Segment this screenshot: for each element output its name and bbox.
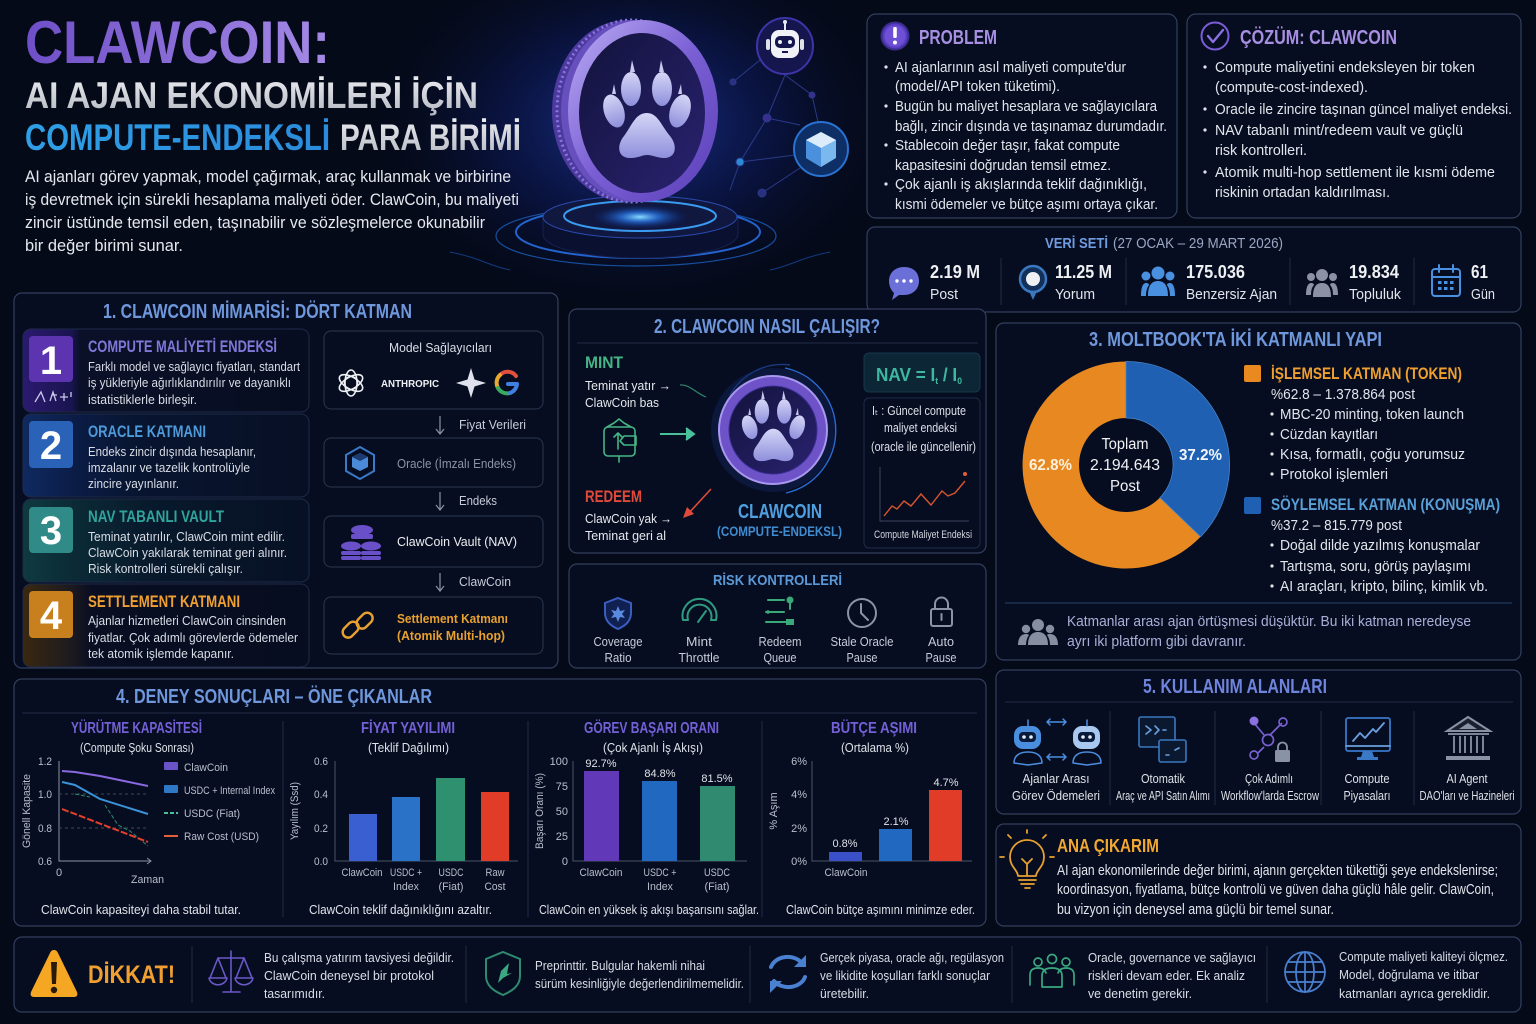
chart: execution capacity: 1.2 bbox=[38, 756, 52, 768]
chart: budget overrun: 2.1% bbox=[883, 816, 909, 828]
chart: task success rate: (Çok Ajanlı İş Akışı) bbox=[603, 741, 703, 755]
chart: task success rate: Başarı Oranı (%) bbox=[534, 773, 546, 849]
arrow: clawcoin: ClawCoin bbox=[459, 575, 511, 589]
legend bbox=[164, 762, 275, 843]
box: model providers: Model Sağlayıcıları bbox=[389, 340, 492, 355]
dataset heading: (27 OCAK – 29 MART 2026) bbox=[1113, 235, 1283, 252]
solution list: (compute-cost-indexed). bbox=[1215, 80, 1368, 96]
chart: execution capacity: 0.6 bbox=[38, 856, 52, 868]
chart: execution capacity: 0.8 bbox=[38, 823, 52, 835]
use case: compute markets bbox=[1344, 718, 1390, 803]
arrow: index bbox=[436, 492, 497, 510]
box: NAV formula: NAV = I bbox=[876, 365, 938, 385]
risk: redeem queue: Redeem bbox=[758, 635, 802, 649]
problem heading: PROBLEM bbox=[919, 27, 997, 49]
layer 4 card: 4 bbox=[40, 594, 63, 638]
disclaimer: ongoing risks: Oracle, governance ve sağlayıcı bbox=[1088, 951, 1256, 965]
stat: agents: 175.036 bbox=[1186, 262, 1245, 282]
disclaimer: preprint: Preprinttir. Bulgular hakemli nihai bbox=[535, 959, 705, 973]
arrow: index: Endeks bbox=[459, 494, 497, 508]
disclaimer: compute is not quality bbox=[1285, 950, 1508, 1001]
disclaimer: real-world conditions: ve likidite koşulları farklı sonuçlar bbox=[820, 969, 990, 983]
disclaimer: preprint bbox=[486, 952, 744, 995]
disclaimer: not investment advice: tasarımıdır. bbox=[264, 987, 325, 1001]
center coin: CLAWCOIN bbox=[738, 501, 822, 523]
solution list: Atomik multi-hop settlement ile kısmi ödeme bbox=[1215, 165, 1495, 181]
box: NAV formula: / I bbox=[938, 365, 957, 385]
risk: auto pause: Auto bbox=[928, 635, 954, 649]
disclaimer: not investment advice: Bu çalışma yatırım tavsiyesi değildir. bbox=[264, 951, 454, 965]
use case: agent payments: Ajanlar Arası bbox=[1022, 772, 1090, 786]
chart: task success rate: (Fiat) bbox=[704, 881, 730, 893]
box: NAV formula bbox=[864, 353, 980, 392]
layer 1 card: Farklı model ve sağlayıcı fiyatları, standart bbox=[88, 359, 300, 374]
layer 4 card: tek atomik işlemde kapanır. bbox=[88, 646, 234, 661]
center coin: (COMPUTE-ENDEKSL) bbox=[717, 523, 842, 539]
chart: task success rate: GÖREV BAŞARI ORANI bbox=[584, 718, 719, 737]
box: oracle: Oracle (İmzalı Endeks) bbox=[397, 456, 516, 471]
subtitle line 2a: COMPUTE-ENDEKSLİ bbox=[25, 117, 330, 158]
legend: transactional layer: MBC-20 minting, token launch bbox=[1280, 407, 1464, 423]
stat: posts: 2.19 M bbox=[930, 262, 980, 282]
icon: warning triangle bbox=[31, 950, 77, 997]
risk: coverage ratio: Ratio bbox=[604, 651, 632, 665]
paw emblem bbox=[599, 60, 695, 158]
icon: check bbox=[1202, 22, 1228, 50]
solution heading: ÇÖZÜM: CLAWCOIN bbox=[1240, 26, 1397, 49]
stat: comments: Yorum bbox=[1055, 287, 1095, 303]
layer 2 card: zincire yayınlanır. bbox=[88, 476, 179, 491]
box: index description and sparkline: Compute Maliyet Endeksi bbox=[874, 529, 972, 541]
box: index description and sparkline bbox=[864, 398, 980, 548]
panel: section 4 results bbox=[14, 679, 986, 926]
chart: budget overrun: 0% bbox=[791, 856, 807, 868]
stat: days: 61 bbox=[1471, 262, 1488, 282]
panel: key takeaway bbox=[996, 824, 1521, 926]
legend: transactional layer: İŞLEMSEL KATMAN (TOKEN) bbox=[1271, 364, 1462, 383]
layer 3 card: Risk kontrolleri sürekli çalışır. bbox=[88, 561, 243, 576]
overlap note bbox=[1067, 614, 1471, 650]
legend: transactional layer bbox=[1244, 364, 1465, 483]
risk: coverage ratio bbox=[594, 598, 643, 665]
use case: DAO treasuries bbox=[1420, 717, 1514, 803]
icon: exclamation bbox=[882, 22, 908, 50]
problem list: bağlı, zincir dışında ve taşınamaz durumdadır. bbox=[895, 119, 1167, 135]
coin bbox=[552, 20, 702, 202]
problem list: AI ajanlarının asıl maliyeti compute'dur bbox=[895, 60, 1126, 76]
solution list: risk kontrolleri. bbox=[1215, 143, 1307, 159]
legend: transactional layer: Protokol işlemleri bbox=[1280, 467, 1388, 483]
use case: automated purchasing bbox=[1116, 717, 1210, 803]
box: settlement: Settlement Katmanı bbox=[397, 611, 508, 626]
layer 3 card: NAV TABANLI VAULT bbox=[88, 507, 224, 526]
stat: comments bbox=[1020, 262, 1112, 303]
redeem block: Teminat geri al bbox=[585, 528, 666, 543]
overlap note: ayrı iki platform gibi davranır. bbox=[1067, 634, 1246, 650]
chart: price dispersion: 0.4 bbox=[314, 789, 328, 801]
chart: task success rate: 75 bbox=[556, 781, 568, 793]
chart: task success rate: 100 bbox=[550, 756, 568, 768]
subtitle line 1: AI AJAN EKONOMİLERİ İÇİN bbox=[25, 75, 478, 116]
use case: escrow: Workflow'larda Escrow bbox=[1221, 789, 1320, 803]
stat: posts bbox=[889, 262, 980, 303]
mint block: ClawCoin bas bbox=[585, 395, 659, 410]
icon: G logo bbox=[497, 372, 517, 393]
section 1 heading: 1. CLAWCOIN MİMARİSİ: DÖRT KATMAN bbox=[103, 300, 412, 323]
chart: price dispersion: ClawCoin teklif dağınıklığını azaltır. bbox=[309, 902, 492, 917]
disclaimer: real-world conditions bbox=[770, 951, 1004, 1001]
solution list: riskinin ortadan kaldırılması. bbox=[1215, 185, 1390, 201]
layer 2 card: 2 bbox=[40, 424, 62, 468]
chart: budget overrun: 4% bbox=[791, 789, 807, 801]
panel: risk controls bbox=[569, 564, 986, 668]
platform rings bbox=[450, 196, 830, 270]
risk: stale oracle pause bbox=[830, 599, 894, 665]
panel: section 5 use cases bbox=[996, 670, 1521, 814]
chart: task success rate: ClawCoin bbox=[580, 867, 622, 879]
legend: conversational layer bbox=[1244, 495, 1500, 595]
legend: conversational layer: Tartışma, soru, görüş paylaşımı bbox=[1280, 559, 1471, 575]
chart: execution capacity: 0 bbox=[56, 867, 62, 879]
mint block: MINT bbox=[585, 353, 624, 372]
box: settlement: (Atomik Multi-hop) bbox=[397, 628, 505, 643]
chart: price dispersion: Yayılım (Ssd) bbox=[289, 782, 301, 840]
risk: mint throttle: Mint bbox=[686, 635, 713, 649]
chart: budget overrun bbox=[768, 718, 975, 917]
chart: compute cost index bbox=[880, 467, 969, 521]
risk: redeem queue bbox=[758, 596, 802, 665]
intro paragraph: iş devretmek için sürekli hesaplama maliyeti öder. ClawCoin, bu maliyeti bbox=[25, 190, 519, 209]
chart: budget overrun: ClawCoin bütçe aşımını minimze eder. bbox=[786, 902, 975, 917]
box: model providers bbox=[324, 331, 543, 409]
layer 2 card bbox=[23, 414, 309, 497]
legend: conversational layer: AI araçları, kripto, bilinç, kimlik vb. bbox=[1280, 579, 1488, 595]
disclaimer: not investment advice bbox=[209, 951, 454, 1001]
box: index description and sparkline: (oracle ile güncellenir) bbox=[871, 440, 976, 454]
use case: escrow: Çok Adımlı bbox=[1245, 772, 1293, 786]
takeaway text: bu vizyon için deneysel ama güçlü bir temel sunar. bbox=[1057, 902, 1334, 918]
risk: coverage ratio: Coverage bbox=[594, 635, 643, 649]
layer 3 card: ClawCoin yakılarak teminat geri alınır. bbox=[88, 545, 287, 560]
risk: redeem queue: Queue bbox=[764, 651, 797, 665]
intro paragraph bbox=[25, 167, 519, 255]
title block bbox=[25, 9, 521, 158]
chart: budget overrun: (Ortalama %) bbox=[841, 741, 909, 755]
chart: task success rate bbox=[534, 718, 759, 917]
donut chart bbox=[1023, 362, 1230, 569]
panel: section 3 two-layer structure bbox=[996, 323, 1521, 660]
stat: communities: 19.834 bbox=[1349, 262, 1399, 282]
risk: auto pause: Pause bbox=[926, 651, 957, 665]
warning heading: DİKKAT! bbox=[88, 961, 175, 989]
disclaimer: compute is not quality: Compute maliyeti kaliteyi ölçmez. bbox=[1339, 950, 1508, 964]
chart: task success rate: 81.5% bbox=[701, 773, 733, 785]
takeaway text bbox=[1057, 863, 1498, 918]
chart: price dispersion: USDC + bbox=[390, 867, 422, 879]
icon: group bbox=[1018, 619, 1058, 645]
chart: execution capacity: Gönell Kapasite bbox=[21, 774, 33, 848]
chart: budget overrun: 6% bbox=[791, 756, 807, 768]
risk: mint throttle: Throttle bbox=[678, 651, 720, 665]
chart: execution capacity: (Compute Şoku Sonrası) bbox=[80, 741, 194, 755]
legend: conversational layer: Doğal dilde yazılmış konuşmalar bbox=[1280, 538, 1480, 554]
donut chart: Toplam bbox=[1102, 436, 1148, 453]
problem list: kapasitesini doğrudan temsil etmez. bbox=[895, 158, 1111, 174]
layer 4 card: SETTLEMENT KATMANI bbox=[88, 592, 240, 611]
section 3 heading: 3. MOLTBOOK'TA İKİ KATMANLI YAPI bbox=[1089, 328, 1382, 351]
chart: execution capacity: ClawCoin kapasiteyi daha stabil tutar. bbox=[41, 902, 241, 917]
chart: price dispersion: ClawCoin bbox=[342, 867, 382, 879]
layer 1 card: COMPUTE MALİYETİ ENDEKSİ bbox=[88, 337, 277, 356]
layer 4 card: fiyatlar. Çok adımlı görevlerde ödemeler bbox=[88, 630, 299, 645]
disclaimer: compute is not quality: katmanları ayrıca gereklidir. bbox=[1339, 987, 1490, 1001]
layer 2 card: ORACLE KATMANI bbox=[88, 422, 206, 441]
legend: USDC + Internal Index bbox=[184, 785, 275, 797]
problem list: (model/API token tüketimi). bbox=[895, 79, 1060, 95]
legend: Raw Cost (USD) bbox=[184, 831, 259, 843]
donut chart: 62.8% bbox=[1029, 457, 1072, 474]
solution list: NAV tabanlı mint/redeem vault ve güçlü bbox=[1215, 123, 1463, 139]
icon: light bulb bbox=[1000, 830, 1054, 888]
risk: stale oracle pause: Pause bbox=[846, 651, 878, 665]
layer 3 card bbox=[23, 499, 309, 582]
dataset heading bbox=[1045, 235, 1283, 252]
chart: price dispersion: 0.6 bbox=[314, 756, 328, 768]
risk: mint throttle bbox=[678, 599, 720, 665]
mint block: Teminat yatır → bbox=[585, 378, 671, 393]
box: vault bbox=[324, 516, 543, 567]
disclaimer: ongoing risks bbox=[1030, 951, 1256, 1001]
section 5 heading: 5. KULLANIM ALANLARI bbox=[1143, 676, 1327, 698]
chart: task success rate: Index bbox=[647, 881, 673, 893]
intro paragraph: bir değer birimi sunar. bbox=[25, 236, 183, 255]
chart: price dispersion: 0.0 bbox=[314, 856, 328, 868]
arrow: price data bbox=[436, 416, 526, 434]
chart: task success rate: USDC bbox=[704, 867, 730, 879]
problem list: Çok ajanlı iş akışlarında teklif dağınıklığı, bbox=[895, 177, 1147, 193]
use case: escrow bbox=[1221, 716, 1320, 803]
chart: execution capacity: YÜRÜTME KAPASİTESİ bbox=[71, 718, 202, 737]
risk: auto pause bbox=[926, 598, 957, 665]
use case: automated purchasing: Araç ve API Satın Alımı bbox=[1116, 789, 1210, 803]
stat: days: Gün bbox=[1471, 287, 1495, 303]
chart: execution capacity: Zaman bbox=[131, 874, 164, 886]
use case: automated purchasing: Otomatik bbox=[1141, 772, 1186, 786]
use case: agent payments: Görev Ödemeleri bbox=[1012, 789, 1100, 803]
risk: stale oracle pause: Stale Oracle bbox=[830, 635, 894, 649]
solution list: Compute maliyetini endeksleyen bir token bbox=[1215, 60, 1475, 76]
overlap note: Katmanlar arası ajan örtüşmesi düşüktür. Bu iki katman neredeyse bbox=[1067, 614, 1471, 630]
legend: conversational layer: %37.2 – 815.779 post bbox=[1271, 518, 1402, 534]
panel: section 2 how it works bbox=[569, 309, 986, 553]
layer 1 card bbox=[23, 329, 309, 412]
icon: wallet bbox=[604, 419, 636, 462]
chart: task success rate: 50 bbox=[556, 806, 568, 818]
box: model providers: ANTHROPIC bbox=[381, 378, 439, 390]
use case: agent payments bbox=[1012, 719, 1101, 803]
chart: task success rate: 25 bbox=[556, 831, 568, 843]
chart: task success rate: 84.8% bbox=[644, 768, 676, 780]
icon: cube badge bbox=[794, 122, 848, 176]
icon: robot badge bbox=[757, 18, 813, 74]
donut chart: Post bbox=[1110, 478, 1141, 495]
layer 4 card bbox=[23, 584, 309, 667]
layer 1 card: istatistiklerle birleşir. bbox=[88, 392, 197, 407]
box: NAV formula: 0 bbox=[957, 376, 962, 386]
solution list: Oracle ile zincire taşınan güncel maliyet endeksi. bbox=[1215, 102, 1512, 118]
stat: comments: 11.25 M bbox=[1055, 262, 1112, 282]
panel: section 1 architecture bbox=[14, 293, 558, 668]
section 4 heading: 4. DENEY SONUÇLARI – ÖNE ÇIKANLAR bbox=[116, 685, 432, 708]
chart: budget overrun: BÜTÇE AŞIMI bbox=[831, 718, 917, 737]
title: ClawCoin: CLAWCOIN: bbox=[25, 9, 330, 76]
disclaimer: ongoing risks: riskleri devam eder. Ek analiz bbox=[1088, 969, 1245, 983]
chart: task success rate: USDC + bbox=[644, 867, 676, 879]
chart: task success rate: 0 bbox=[562, 856, 568, 868]
intro paragraph: AI ajanları görev yapmak, model çağırmak, araç kullanmak ve birbirine bbox=[25, 167, 511, 186]
redeem block: ClawCoin yak → bbox=[585, 511, 672, 526]
layer 3 card: Teminat yatırılır, ClawCoin mint edilir. bbox=[88, 529, 285, 544]
chart: budget overrun: % Aşım bbox=[768, 792, 780, 830]
use case: compute markets: Piyasaları bbox=[1344, 789, 1390, 803]
box: oracle bbox=[324, 438, 543, 487]
arrow: mint bbox=[660, 428, 694, 440]
chart: price dispersion: Cost bbox=[484, 881, 506, 893]
chart: price dispersion: USDC bbox=[438, 867, 464, 879]
problem list: Bugün bu maliyet hesaplara ve sağlayıcılara bbox=[895, 99, 1158, 115]
chart: execution capacity bbox=[21, 718, 275, 917]
stat: posts: Post bbox=[930, 287, 958, 303]
chart: execution capacity: 1.0 bbox=[38, 789, 52, 801]
panel: disclaimer bar bbox=[14, 937, 1521, 1012]
disclaimer: real-world conditions: Gerçek piyasa, oracle ağı, regülasyon bbox=[820, 951, 1004, 965]
chart: budget overrun: 4.7% bbox=[933, 777, 959, 789]
chart: price dispersion bbox=[289, 719, 518, 917]
chart: budget overrun: 0.8% bbox=[832, 838, 858, 850]
arrow: clawcoin bbox=[436, 573, 511, 591]
chart: task success rate: 92.7% bbox=[585, 758, 617, 770]
donut chart: 2.194.643 bbox=[1090, 457, 1160, 474]
layer 3 card: 3 bbox=[40, 509, 62, 553]
panel: solution bbox=[1187, 14, 1521, 218]
stat: agents: Benzersiz Ajan bbox=[1186, 287, 1277, 303]
mint block bbox=[585, 353, 706, 462]
layer 1 card: 1 bbox=[40, 339, 62, 383]
icon: model logo star bbox=[456, 368, 486, 398]
hero illustration: coin on platform bbox=[450, 18, 848, 270]
icon: model logo 1 bbox=[337, 370, 365, 396]
disclaimer: compute is not quality: Model, doğrulama ve itibar bbox=[1339, 968, 1479, 982]
takeaway heading: ANA ÇIKARIM bbox=[1057, 836, 1159, 856]
problem list: Stablecoin değer taşır, fakat compute bbox=[895, 138, 1120, 154]
panel: problem bbox=[867, 14, 1177, 218]
network lines bbox=[730, 60, 818, 197]
dataset heading: VERİ SETİ bbox=[1045, 235, 1108, 252]
problem list bbox=[884, 60, 1167, 213]
layer 4 card: Ajanlar hizmetleri ClawCoin cinsinden bbox=[88, 613, 286, 628]
box: settlement bbox=[324, 597, 543, 654]
stat: communities bbox=[1306, 262, 1402, 303]
legend: transactional layer: Kısa, formatlı, çoğu yorumsuz bbox=[1280, 447, 1465, 463]
redeem block bbox=[585, 487, 711, 543]
chart: task success rate: ClawCoin en yüksek iş akışı başarısını sağlar. bbox=[539, 902, 759, 917]
redeem block: REDEEM bbox=[585, 487, 642, 506]
disclaimer: ongoing risks: ve denetim gerekir. bbox=[1088, 987, 1192, 1001]
box: index description and sparkline: maliyet endeksi bbox=[884, 421, 957, 435]
chart: price dispersion: FİYAT YAYILIMI bbox=[361, 719, 455, 737]
box: vault: ClawCoin Vault (NAV) bbox=[397, 534, 517, 549]
legend: transactional layer: %62.8 – 1.378.864 post bbox=[1271, 387, 1415, 403]
box: index description and sparkline: Iₜ : Güncel compute bbox=[872, 404, 966, 418]
center coin bbox=[711, 364, 842, 539]
use case: compute markets: Compute bbox=[1344, 772, 1390, 786]
box: NAV formula: t bbox=[935, 376, 938, 386]
stat: communities: Topluluk bbox=[1349, 287, 1402, 303]
chart: price dispersion: Raw bbox=[486, 867, 505, 879]
legend: USDC (Fiat) bbox=[184, 808, 240, 820]
chart: price dispersion: (Teklif Dağılımı) bbox=[368, 741, 449, 755]
risk heading: RİSK KONTROLLERİ bbox=[713, 572, 842, 589]
arrow: price data: Fiyat Verileri bbox=[459, 418, 526, 432]
problem list: kısmi ödemeler ve bütçe aşımı ortaya çıkar. bbox=[895, 197, 1158, 213]
disclaimer: real-world conditions: üretebilir. bbox=[820, 987, 869, 1001]
legend: ClawCoin bbox=[184, 762, 228, 774]
panel: dataset bbox=[867, 227, 1521, 312]
layer 1 card: iş yükleriyle ağırlıklandırılır ve dayanıklı bbox=[88, 375, 291, 390]
disclaimer: not investment advice: ClawCoin deneysel bir protokol bbox=[264, 969, 434, 983]
layer 2 card: imzalanır ve tazelik kontrolüyle bbox=[88, 460, 250, 475]
chart: price dispersion: (Fiat) bbox=[438, 881, 464, 893]
chart: budget overrun: 2% bbox=[791, 823, 807, 835]
chart: price dispersion: Index bbox=[393, 881, 419, 893]
layer 2 card: Endeks zincir dışında hesaplanır, bbox=[88, 444, 256, 459]
stat: agents bbox=[1141, 262, 1277, 303]
chart: price dispersion: 0.2 bbox=[314, 823, 328, 835]
chart: budget overrun: ClawCoin bbox=[824, 867, 868, 879]
section 2 heading: 2. CLAWCOIN NASIL ÇALIŞIR? bbox=[654, 316, 880, 338]
donut chart: 37.2% bbox=[1179, 447, 1222, 464]
disclaimer: preprint: sürüm kesinliğiyle değerlendirilmemelidir. bbox=[535, 977, 744, 991]
subtitle line 2b: PARA BİRİMİ bbox=[340, 117, 521, 158]
legend: transactional layer: Cüzdan kayıtları bbox=[1280, 427, 1378, 443]
arrow: redeem bbox=[683, 489, 711, 518]
intro paragraph: zincir üstünde temsil eden, taşınabilir ve sözleşmelerce okunabilir bbox=[25, 213, 485, 232]
solution list bbox=[1203, 60, 1512, 201]
stat: days bbox=[1432, 262, 1495, 303]
use case: DAO treasuries: AI Agent bbox=[1446, 772, 1488, 786]
